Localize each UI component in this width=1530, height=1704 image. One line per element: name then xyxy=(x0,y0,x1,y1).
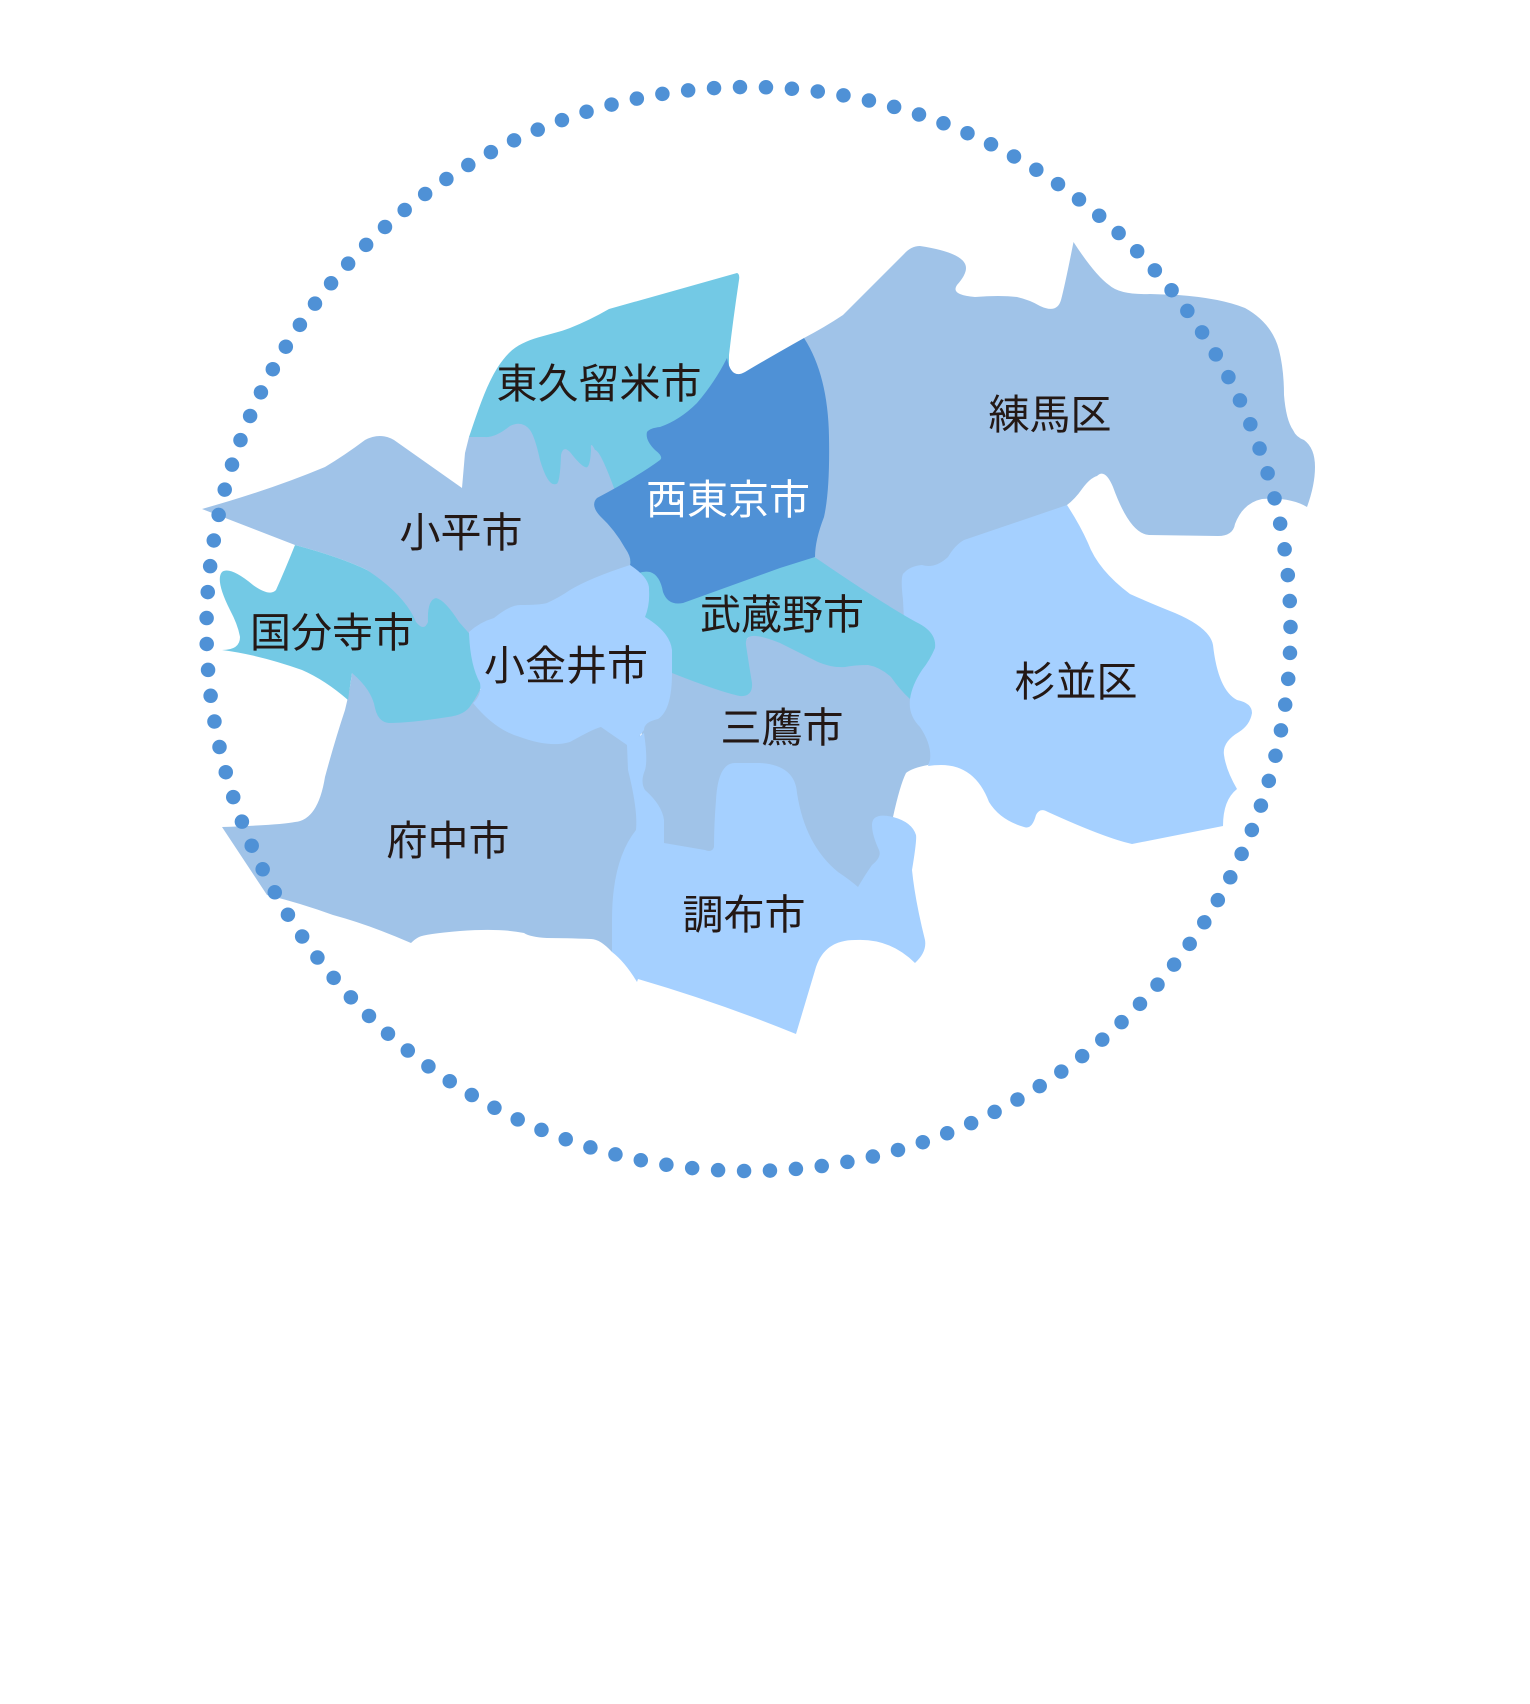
label: 東久留米市: 東久留米市 xyxy=(496,361,702,407)
dotted circle xyxy=(198,79,1299,1179)
region: 西東京市 xyxy=(594,338,829,604)
region: 杉並区 xyxy=(902,505,1252,844)
label: 三鷹市: 三鷹市 xyxy=(720,705,844,751)
region: 練馬区 xyxy=(790,242,1315,680)
region: 国分寺市 xyxy=(220,545,482,723)
region: 小金井市 xyxy=(469,565,672,748)
label: 練馬区: 練馬区 xyxy=(988,392,1112,438)
label: 小平市: 小平市 xyxy=(400,510,522,556)
label: 国分寺市: 国分寺市 xyxy=(250,610,414,656)
region: 府中市 xyxy=(222,673,640,952)
region: 調布市 xyxy=(612,733,925,1034)
map: municipality regions xyxy=(202,242,1315,1034)
municipality labels xyxy=(250,361,1138,938)
label: 府中市: 府中市 xyxy=(386,818,510,864)
region: 東久留米市 xyxy=(469,273,739,495)
region: 小平市 xyxy=(202,410,640,640)
region: 武蔵野市 xyxy=(630,556,935,699)
label: 杉並区: 杉並区 xyxy=(1014,659,1138,705)
label: 武蔵野市: 武蔵野市 xyxy=(700,592,864,638)
label: 小金井市: 小金井市 xyxy=(484,643,648,689)
region: 三鷹市 xyxy=(640,630,931,900)
label: 西東京市: 西東京市 xyxy=(646,477,810,523)
label: 調布市: 調布市 xyxy=(682,892,806,938)
